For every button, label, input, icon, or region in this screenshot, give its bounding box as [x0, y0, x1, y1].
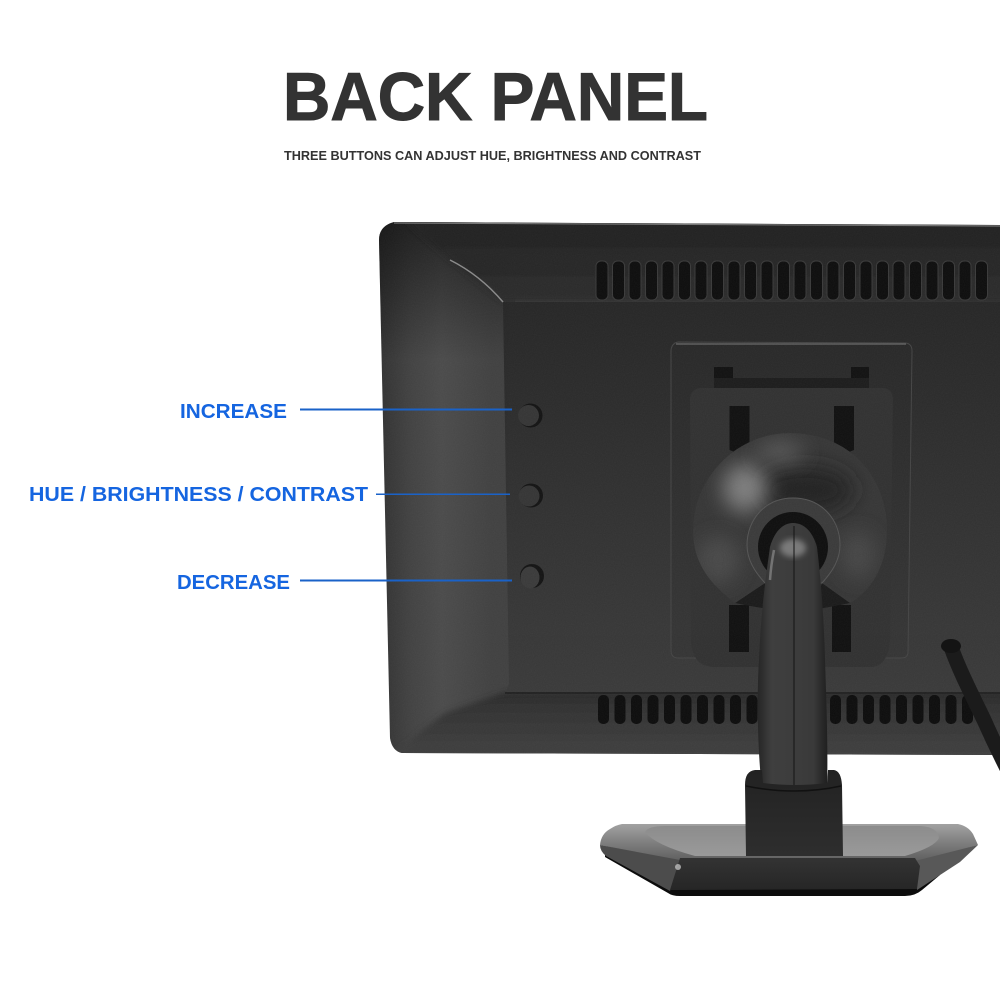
- button: increase: [518, 404, 542, 428]
- monitor back panel: [375, 215, 1000, 765]
- power cable: [941, 639, 1000, 778]
- ball joint: [694, 433, 884, 592]
- callout: hue / brightness / contrast: HUE / BRIGHTNESS / CONTRAST: [29, 484, 368, 506]
- base highlight: [675, 864, 681, 870]
- centre recessed panel: [503, 302, 1000, 693]
- stand arm: [758, 523, 827, 790]
- plate top highlight: [676, 343, 906, 345]
- plate slots: [729, 406, 854, 652]
- noise texture: [430, 230, 999, 722]
- monitor body: [379, 222, 1000, 755]
- bevel bands: [375, 215, 1000, 765]
- shadow under ball: [735, 583, 850, 610]
- socket hole: [758, 512, 828, 582]
- subtitle: THREE BUTTONS CAN ADJUST HUE, BRIGHTNESS AND CONTRAST: [284, 148, 701, 163]
- lower ledge shadow: [505, 692, 1000, 694]
- button: mode: [518, 484, 543, 508]
- base front face: [670, 858, 920, 890]
- bottom vents: [598, 695, 973, 724]
- base top face: [600, 824, 978, 863]
- title: BACK PANEL: [283, 59, 708, 135]
- base left facet: [600, 845, 680, 891]
- base inset: [645, 826, 939, 856]
- inner mounting plate: [690, 388, 893, 667]
- stand collar: [745, 770, 843, 856]
- button: decrease: [520, 564, 544, 588]
- callout: increase: INCREASE: [180, 401, 287, 423]
- outer mounting plate: [671, 342, 912, 658]
- plate top tabs: [714, 367, 869, 389]
- top vents: [596, 261, 988, 300]
- base right facet: [915, 845, 978, 890]
- top rim highlight: [394, 223, 1000, 226]
- socket ring: [747, 498, 840, 583]
- callout: decrease: DECREASE: [177, 572, 290, 594]
- stand base: [600, 824, 978, 896]
- felt pad: [605, 850, 940, 896]
- bevel highlight: [450, 260, 503, 302]
- arm highlight: [780, 539, 806, 557]
